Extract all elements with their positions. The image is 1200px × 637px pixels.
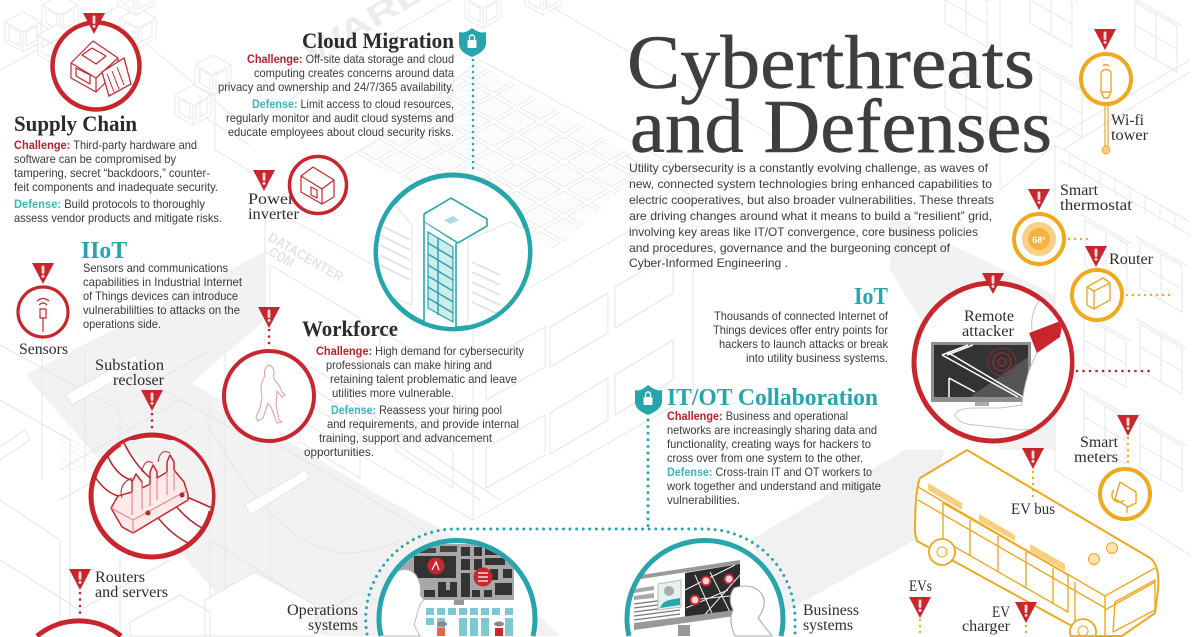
IoT text xyxy=(713,309,889,365)
icon: sensor xyxy=(18,287,68,337)
IoT text: Things devices offer entry points for xyxy=(713,323,888,337)
intro paragraph: new, connected system technologies bring enhanced capabilities to xyxy=(629,177,992,191)
IT/OT text: Defense: Cross-train IT and OT workers to xyxy=(667,465,872,479)
title: Cyberthreats xyxy=(627,21,1035,105)
warning marker xyxy=(69,569,91,590)
label: smart thermostat: Smart xyxy=(1060,182,1099,199)
panel: IT/OT collaboration xyxy=(287,385,881,636)
label: power inverter: inverter xyxy=(248,206,300,223)
label: business systems: Business xyxy=(803,602,859,619)
datacenter dot com lettering: .COM xyxy=(264,242,297,271)
label: EV charger: charger xyxy=(962,618,1011,635)
icon: router xyxy=(1072,270,1122,320)
icon: recloser xyxy=(91,435,215,557)
intro paragraph: involving key areas like IT/OT convergence, core business policies xyxy=(629,225,978,239)
title: and Defenses xyxy=(630,85,1052,169)
illustration: remote attacker xyxy=(914,273,1075,441)
warning marker xyxy=(1117,415,1139,436)
intro paragraph: electric cooperatives, but also broader vulnerabilities. These threats xyxy=(629,193,994,207)
dotted connector xyxy=(919,620,921,634)
intro paragraph: are driving changes around what it means to build a “resilient” grid, xyxy=(629,209,992,223)
dotted connector xyxy=(1127,294,1171,296)
heading: cloud migration: Cloud Migration xyxy=(302,28,454,53)
intro paragraph: Utility cybersecurity is a constantly evolving challenge, as waves of xyxy=(629,161,989,175)
cloud migration text: computing creates concerns around data xyxy=(254,66,454,80)
supply chain text: feit components and inadequate security. xyxy=(14,180,218,194)
warning marker xyxy=(258,307,280,328)
icon: router circle xyxy=(37,621,121,636)
IT/OT text: functionality, creating ways for hackers to xyxy=(667,437,871,451)
cloud migration text: privacy and ownership and 24/7/365 availability. xyxy=(218,80,454,94)
IT/OT text: networks are increasingly sharing data and xyxy=(667,423,877,437)
label: sensors: Sensors xyxy=(19,341,68,358)
workforce text: Defense: Reassess your hiring pool xyxy=(331,403,502,417)
panel: power inverter xyxy=(248,156,346,223)
label: smart meters: Smart xyxy=(1080,434,1119,451)
icon: workforce person xyxy=(224,351,314,441)
panel: smart meters xyxy=(1074,415,1150,519)
panel: router xyxy=(1072,246,1171,320)
icon: supply chain circle xyxy=(52,13,140,110)
workforce text: and requirements, and provide internal xyxy=(327,417,519,431)
workforce text: Challenge: High demand for cybersecurity xyxy=(316,344,524,358)
IIoT text: vulnerabililties to attacks on the xyxy=(83,303,240,317)
warning marker xyxy=(1015,602,1037,623)
warning marker xyxy=(1028,189,1050,210)
cloud migration text: Challenge: Off-site data storage and cloud xyxy=(247,52,454,66)
warning marker xyxy=(909,597,931,618)
dotted connector xyxy=(1069,238,1088,240)
label: wi-fi tower: tower xyxy=(1111,127,1149,144)
supply chain text: tampering, secret “backdoors,” counter- xyxy=(14,166,210,180)
IIoT text: operations side. xyxy=(83,317,161,331)
icon: wi-fi tower xyxy=(1081,54,1131,154)
illustration: business systems xyxy=(627,540,783,636)
label: EV charger xyxy=(962,604,1011,635)
IIoT text: of Things devices can introduce xyxy=(83,289,238,303)
label: EV bus: EV bus xyxy=(1011,501,1055,518)
workforce text: opportunities. xyxy=(304,445,374,459)
icon: shield lock xyxy=(459,28,486,57)
dotted connector xyxy=(1025,626,1027,634)
dotted connector xyxy=(268,330,270,346)
panel: wi-fi tower xyxy=(1081,29,1149,154)
cloud migration text xyxy=(218,52,454,139)
title xyxy=(627,21,1052,169)
label: substation recloser: Substation xyxy=(95,357,164,374)
panel: routers and servers xyxy=(37,569,168,636)
panel: EV bus xyxy=(915,448,1158,636)
IT/OT text: cross over from one system to the other. xyxy=(667,451,863,465)
supply chain text xyxy=(14,138,222,225)
warning marker xyxy=(253,170,275,191)
workforce text: retaining talent problematic and leave xyxy=(330,372,517,386)
heading: IT/OT collaboration: IT/OT Collaboration xyxy=(667,385,878,411)
warning marker xyxy=(141,390,163,411)
cloud migration text: regularly monitor and audit cloud systems and xyxy=(226,111,454,125)
IT/OT text: vulnerabilities. xyxy=(667,493,740,507)
illustration: EV bus xyxy=(915,450,1158,636)
label: remote attacker xyxy=(962,308,1015,340)
label: EV charger: EV xyxy=(992,604,1010,621)
IIoT text: capabilities in Industrial Internet xyxy=(83,275,243,289)
heading: supply chain: Supply Chain xyxy=(14,111,137,136)
IIoT text xyxy=(83,261,243,331)
label: power inverter: Power xyxy=(248,191,295,208)
supply chain text: Challenge: Third-party hardware and xyxy=(14,138,197,152)
panel: EVs xyxy=(909,578,932,634)
cloud migration text: educate employees about cloud security risks. xyxy=(228,125,454,139)
label: router: Router xyxy=(1109,251,1154,268)
icon: shield lock xyxy=(635,385,662,415)
cloud migration text: Defense: Limit access to cloud resources, xyxy=(252,97,454,111)
warning marker xyxy=(1022,448,1044,469)
panel: remote attacker xyxy=(914,273,1153,441)
intro paragraph: Cyber-Informed Engineering . xyxy=(629,256,788,270)
dotted connector tree xyxy=(366,420,795,634)
label: operations systems: Operations xyxy=(287,602,358,619)
IoT text: hackers to launch attacks or break xyxy=(719,337,889,351)
warning marker xyxy=(32,263,54,284)
supply chain text: software can be compromised by xyxy=(14,152,176,166)
label: smart thermostat xyxy=(1060,182,1133,214)
label: routers and servers xyxy=(95,569,168,601)
label: routers and servers: and servers xyxy=(95,584,168,601)
heading: workforce: Workforce xyxy=(302,316,398,341)
IoT text: Thousands of connected Internet of xyxy=(714,309,889,323)
dotted connector xyxy=(151,414,153,428)
heading: IIoT: IIoT xyxy=(81,238,127,264)
panel: EV charger xyxy=(962,602,1037,635)
datacenter wall lettering: DATACENTER xyxy=(266,229,346,285)
IT/OT text: Challenge: Business and operational xyxy=(667,409,848,423)
workforce text: professionals can make hiring and xyxy=(326,358,492,372)
supply chain text: assess vendor products and mitigate risks. xyxy=(14,211,222,225)
label: substation recloser xyxy=(95,357,165,389)
IoT text: into utility business systems. xyxy=(746,351,888,365)
panel: supply chain xyxy=(14,13,222,225)
dotted connector xyxy=(472,60,474,172)
workforce text xyxy=(304,344,524,459)
label: smart meters xyxy=(1074,434,1119,466)
warning marker xyxy=(1085,246,1107,267)
panel: smart thermostat xyxy=(1014,182,1133,264)
IIoT text: Sensors and communications xyxy=(83,261,228,275)
dotted connector xyxy=(1077,370,1153,372)
label: wi-fi tower: Wi-fi xyxy=(1111,112,1145,129)
panel: substation recloser xyxy=(91,357,215,557)
label: remote attacker: attacker xyxy=(962,323,1015,340)
label: power inverter xyxy=(248,191,300,223)
label: substation recloser: recloser xyxy=(113,372,165,389)
right margin xyxy=(1190,0,1200,637)
illustration: operations systems xyxy=(378,540,535,636)
IT/OT text xyxy=(666,409,881,507)
icon: inverter box xyxy=(290,156,346,214)
remote attacker warning xyxy=(982,273,1004,294)
panel: cloud migration xyxy=(218,28,530,330)
panel: IoT xyxy=(713,284,889,365)
dotted connector xyxy=(1127,438,1129,466)
warning marker xyxy=(1094,29,1116,50)
label: wi-fi tower xyxy=(1111,112,1149,144)
icon: thermostat: 68° xyxy=(1032,235,1046,245)
heading: IoT: IoT xyxy=(854,284,888,310)
label: operations systems: systems xyxy=(308,617,358,634)
label: smart thermostat: thermostat xyxy=(1060,197,1133,214)
label: business systems: systems xyxy=(803,617,853,634)
label: EVs: EVs xyxy=(909,578,932,595)
workforce text: training, support and advancement xyxy=(319,431,493,445)
IT/OT text: work together and understand and mitigate xyxy=(666,479,881,493)
intro paragraph: and procedures, governance and the burgeoning concept of xyxy=(629,241,951,255)
dotted connector xyxy=(79,593,81,615)
label: business systems xyxy=(803,602,859,634)
icon: smart meter xyxy=(1100,469,1150,519)
workforce text: utilities more vulnerable. xyxy=(332,386,454,400)
label: routers and servers: Routers xyxy=(95,569,145,586)
panel: workforce xyxy=(224,307,524,459)
supply chain text: Defense: Build protocols to thoroughly xyxy=(14,197,205,211)
label: operations systems xyxy=(287,602,358,634)
dotted connector xyxy=(1032,472,1034,498)
label: smart meters: meters xyxy=(1074,449,1118,466)
label: remote attacker: Remote xyxy=(964,308,1014,325)
intro paragraph xyxy=(629,161,994,270)
icon: datacenter server circle xyxy=(376,175,530,330)
panel: IIoT xyxy=(18,238,243,358)
